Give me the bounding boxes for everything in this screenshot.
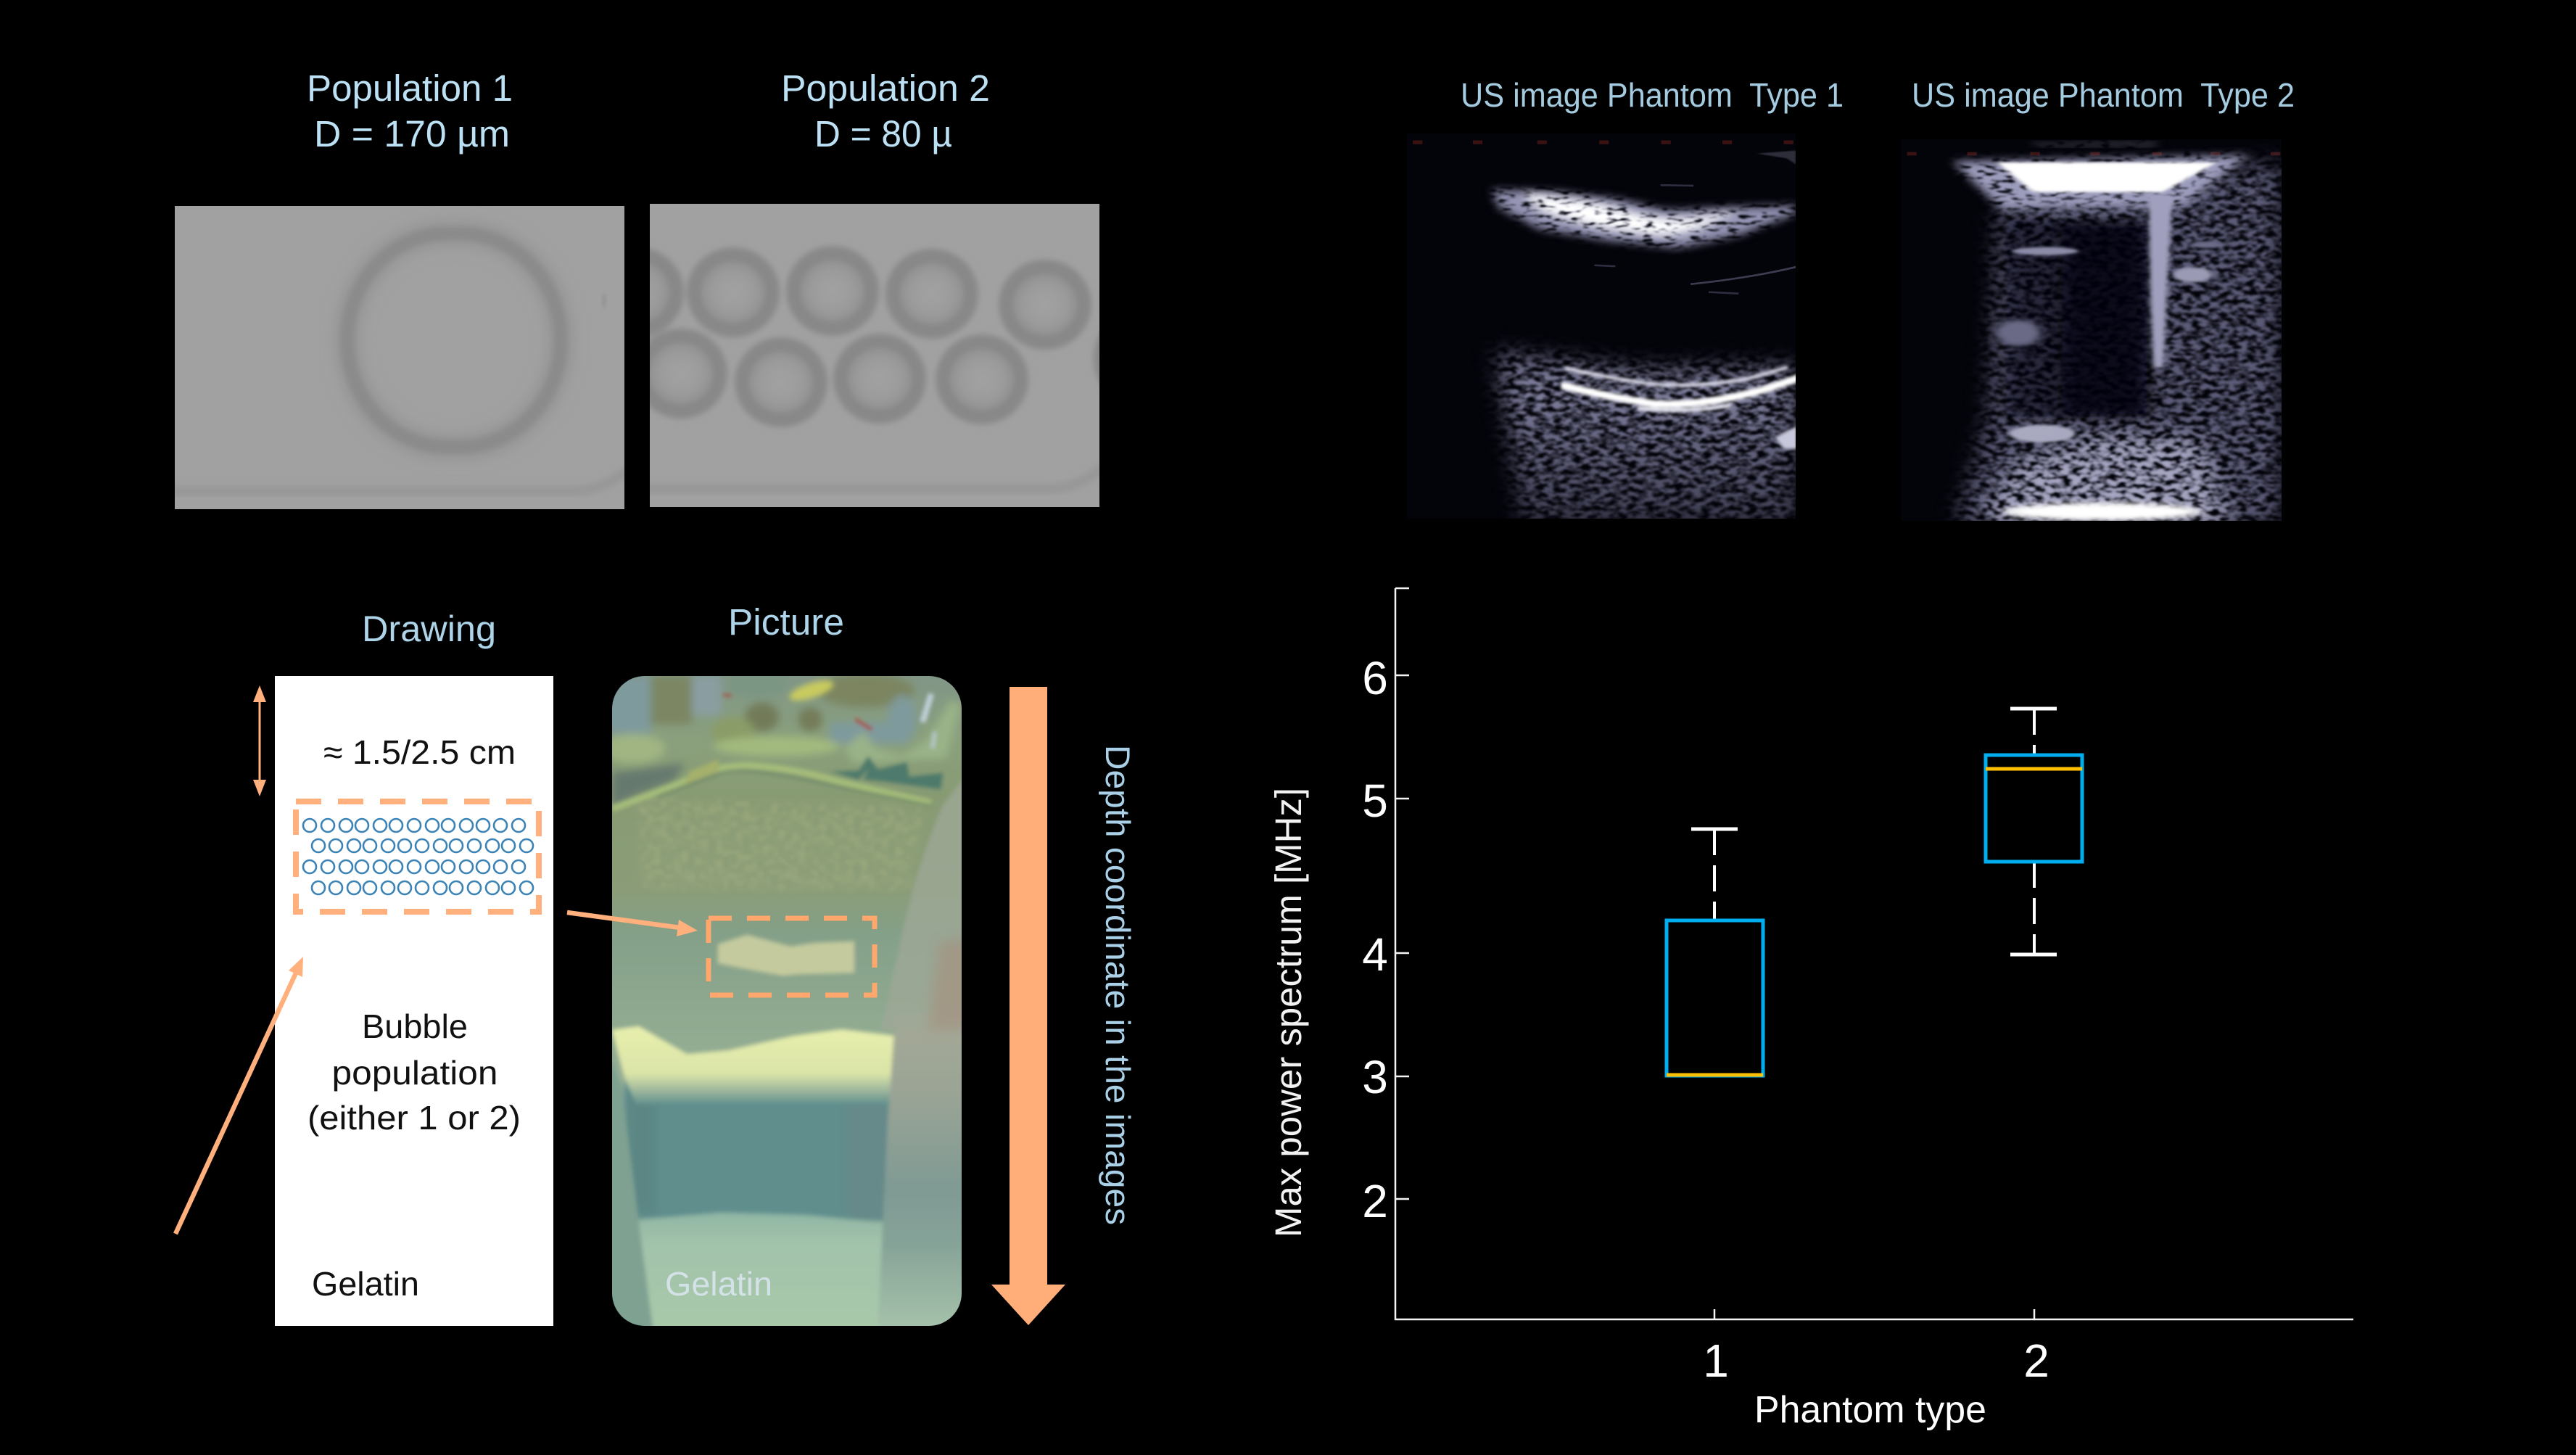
left wall (612, 1062, 654, 1326)
x tick labels (1703, 1335, 2049, 1387)
photo details: sandy texture (636, 797, 924, 891)
micrograph: population 1 bubble (167, 206, 627, 509)
heading: Population 2: D = 80 µ (814, 113, 952, 154)
photo details: upper scene (603, 674, 962, 891)
depth ticks (1907, 152, 2280, 155)
y tick labels: 4 (1362, 928, 1388, 981)
x axis title: Phantom type (1754, 1389, 1986, 1431)
bubble population text: Bubble (362, 1007, 468, 1045)
y tick labels: 3 (1362, 1051, 1388, 1103)
bubble population text: (either 1 or 2) (307, 1099, 521, 1137)
pale gelatin floor (637, 1213, 883, 1335)
chart: box plot of max power spectrum (1268, 588, 2353, 1431)
y tick labels: 5 (1362, 775, 1388, 827)
micrograph: population 2 bubbles (650, 204, 1099, 507)
panel: phantom drawing (275, 676, 553, 1326)
label: Drawing: Drawing (362, 609, 496, 649)
gelatin label on photo: Gelatin (665, 1265, 772, 1303)
arrow: depth dimension double arrow (253, 685, 266, 796)
heading: Population 2: Population 2 (781, 67, 990, 109)
heading: Population 1 (307, 67, 513, 154)
bubble layer dashed outline (296, 801, 539, 912)
box: phantom type 2 (1986, 709, 2082, 955)
arrow: pointer to bubble layer (176, 957, 303, 1234)
bubble population text (307, 1007, 521, 1137)
x tick labels: 1 (1703, 1335, 1729, 1387)
arrow: depth direction (991, 687, 1065, 1325)
label: depth coordinate: Depth coordinate in the images (1098, 745, 1136, 1225)
bright interface lines (1564, 368, 1799, 411)
y tick labels (1362, 652, 1388, 1227)
label: Picture: Picture (728, 601, 844, 643)
ultrasound image: phantom type 2 (1901, 139, 2282, 525)
panel: phantom photograph (612, 676, 962, 1326)
bright band (612, 1026, 896, 1105)
bubble population text: population (332, 1054, 498, 1092)
dimension label: ≈ 1.5/2.5 cm (323, 733, 516, 771)
ultrasound image: phantom type 1 (1407, 133, 1799, 525)
heading: Population 1: D = 170 µm (314, 113, 510, 154)
arrow: drawing to photo (567, 912, 698, 936)
axes (1395, 588, 2353, 1319)
teal layer (624, 1083, 890, 1221)
heading: Population 2 (781, 67, 990, 154)
heading: US image type 1: US image Phantom Type 1 (1461, 76, 1844, 114)
bubble layer dashed outline on photo (709, 918, 875, 995)
y tick labels: 6 (1362, 652, 1388, 704)
right wall (881, 1029, 962, 1285)
y axis title: Max power spectrum [MHz] (1268, 788, 1309, 1237)
depth ticks (1413, 141, 1793, 144)
photo details: lower layers (607, 1013, 970, 1335)
right wall upper (883, 779, 962, 1029)
x tick labels: 2 (2023, 1335, 2049, 1387)
heading: US image type 2: US image Phantom Type 2 (1912, 76, 2295, 114)
heading: Population 1: Population 1 (307, 67, 513, 109)
y tick labels: 2 (1362, 1175, 1388, 1227)
gelatin label: Gelatin (312, 1265, 419, 1303)
box: phantom type 1 (1667, 829, 1763, 1076)
embedded bubble patch (718, 935, 854, 976)
bubble population circles (303, 819, 533, 894)
